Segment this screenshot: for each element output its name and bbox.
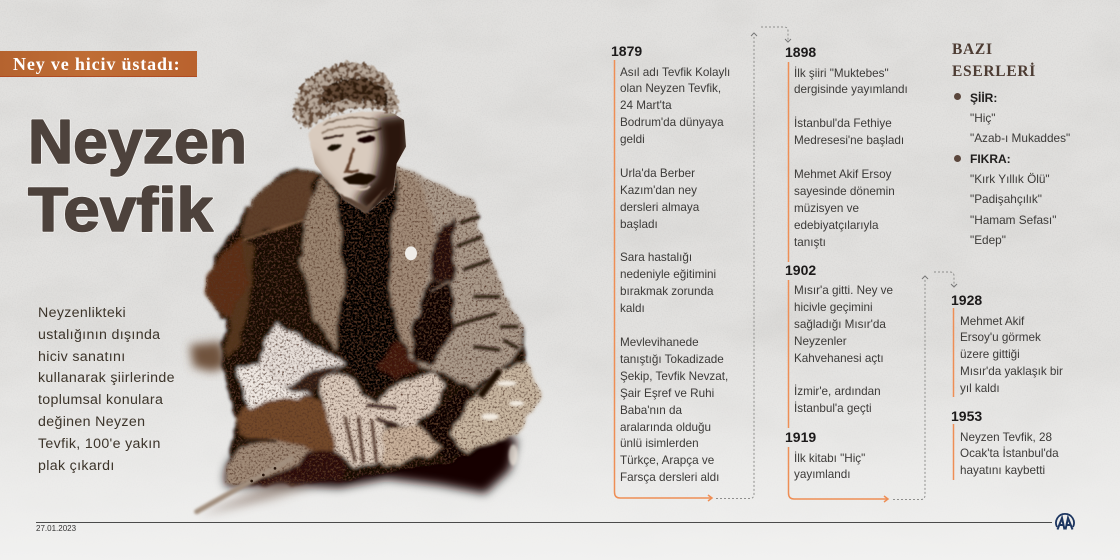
text 1953 [960, 430, 1059, 477]
text 1928: üzere gittiği [960, 348, 1020, 361]
face details [322, 118, 387, 213]
text 1879: aralarında olduğu [620, 421, 711, 434]
list: anecdotes: "Edep" [970, 233, 1006, 247]
title: Tevfik [28, 176, 214, 245]
timeline 1919 [785, 429, 865, 481]
text 1879: ünlü isimlerden [620, 437, 699, 450]
text 1898: sayesinde dönemin [794, 185, 895, 198]
list: poems: "Azab-ı Mukaddes" [970, 131, 1070, 145]
trousers [237, 397, 343, 460]
category: fıkra: FIKRA: [970, 152, 1011, 166]
title: Neyzen [28, 108, 247, 177]
list: anecdotes: "Kırk Yıllık Ölü" [970, 172, 1050, 186]
right lapel [390, 163, 437, 368]
title: Neyzen [28, 108, 247, 177]
list: anecdotes: "Hamam Sefası" [970, 213, 1056, 227]
text 1928: yıl kaldı [960, 382, 1000, 395]
coat [242, 172, 317, 238]
text 1879: Farsça dersleri aldı [620, 471, 719, 484]
text 1879: olan Neyzen Tevfik, [620, 82, 721, 95]
text 1879: başladı [620, 218, 658, 231]
face shadow [308, 113, 410, 217]
text 1928: Ersoy'u görmek [960, 331, 1041, 344]
banner: Ney ve hiciv üstadı [0, 51, 197, 77]
title [27, 108, 247, 245]
black sweater [337, 173, 423, 393]
category: şiir: ŞİİR: [970, 91, 997, 105]
head [308, 111, 406, 213]
text 1928: Mısır'da yaklaşık bir [960, 365, 1063, 378]
text 1879: Urla'da Berber [620, 167, 695, 180]
flute base shadow [200, 480, 313, 515]
year 1898: 1898 [785, 44, 816, 60]
text 1928 [960, 314, 1063, 395]
intro paragraph: Neyzenlikteki [38, 305, 126, 321]
text 1879: dersleri almaya [620, 201, 699, 214]
timeline 1879 [611, 43, 730, 484]
intro paragraph: hiciv sanatını [38, 349, 126, 365]
right log [450, 362, 542, 452]
text 1898: Medresesi'ne başladı [794, 134, 904, 147]
left sleeve [258, 323, 347, 393]
banner: Ney ve hiciv üstadı: Ney ve hiciv üstadı: [13, 54, 180, 74]
text 1879: tanıştığı Tokadizade [620, 353, 724, 366]
text 1902: İzmir'e, ardından [794, 385, 881, 398]
text 1879: bırakmak zorunda [620, 285, 714, 298]
cuff [283, 365, 345, 398]
intro paragraph: kullanarak şiirlerinde [38, 370, 175, 386]
text 1902: İstanbul'a geçti [794, 402, 872, 415]
list: anecdotes: "Padişahçılık" [970, 192, 1042, 206]
portrait of Neyzen Tevfik [183, 60, 544, 517]
text 1953: Neyzen Tevfik, 28 [960, 430, 1052, 444]
intro paragraph: ustalığının dışında [38, 327, 160, 343]
hair [293, 62, 398, 130]
text 1879: Kazım'dan ney [620, 184, 697, 197]
timeline 1928 [951, 292, 1063, 395]
works heading: ESERLERİ [952, 63, 1036, 80]
text 1902: Mısır'a gitti. Ney ve [794, 284, 893, 297]
text 1898: İstanbul'da Fethiye [794, 117, 892, 130]
year 1879: 1879 [611, 43, 642, 59]
left lapel [300, 177, 345, 350]
year 1919: 1919 [785, 429, 816, 445]
intro paragraph: Tevfik, 100'e yakın [38, 436, 161, 452]
intro paragraph: toplumsal konulara [38, 392, 163, 408]
text 1879: Asıl adı Tevfik Kolaylı [620, 66, 730, 78]
text 1879: Bodrum'da dünyaya [620, 116, 724, 129]
text 1898: edebiyatçılarıyla [794, 219, 878, 232]
panel: some works [952, 41, 1070, 247]
footer rule [36, 522, 1052, 523]
timeline 1898 [785, 44, 908, 249]
text 1879: 24 Mart'ta [620, 99, 672, 112]
jacket dark front [412, 280, 455, 367]
year 1902: 1902 [785, 262, 816, 278]
text 1919 [794, 452, 865, 481]
intro paragraph [38, 305, 175, 474]
text 1898: dergisinde yayımlandı [794, 83, 908, 96]
text 1879: Türkçe, Arapça ve [620, 454, 714, 467]
text 1898: tanıştı [794, 236, 826, 249]
year 1928: 1928 [951, 292, 982, 308]
list: anecdotes [970, 172, 1056, 247]
text 1879: nedeniyle eğitimini [620, 268, 716, 281]
text 1879: kaldı [620, 302, 645, 315]
text 1898: İlk şiiri "Muktebes" [794, 66, 889, 80]
text 1879: Şair Eşref ve Ruhi [620, 387, 714, 400]
year 1953: 1953 [951, 408, 982, 424]
date: 27.01.2023 [36, 524, 76, 533]
jacket creases and hand details [237, 217, 518, 463]
text 1879: Sara hastalığı [620, 251, 692, 264]
works heading: BAZI [952, 41, 993, 58]
text 1879 [620, 66, 730, 484]
bullet [954, 93, 961, 100]
text 1879: Mevlevihanede [620, 336, 699, 349]
text 1902: hicivle geçimini [794, 301, 873, 314]
left log [190, 342, 227, 372]
hands [320, 373, 445, 467]
text 1902: sağladığı Mısır'da [794, 318, 886, 331]
text 1898 [794, 66, 908, 249]
highlights on log [481, 381, 524, 466]
text 1928: Mehmet Akif [960, 314, 1024, 328]
bullet [954, 155, 961, 162]
ney flute [197, 458, 292, 512]
text 1902: Neyzenler [794, 335, 847, 348]
text 1953: hayatını kaybetti [960, 464, 1045, 477]
timeline 1953 [951, 408, 1059, 477]
text 1902 [794, 284, 893, 415]
intro paragraph: değinen Neyzen [38, 414, 145, 430]
text 1879: Baba'nın da [620, 404, 682, 417]
text 1919: İlk kitabı "Hiç" [794, 452, 865, 464]
text 1898: müzisyen ve [794, 202, 859, 215]
ground shadow [225, 407, 517, 493]
list: poems [970, 111, 1070, 145]
intro paragraph: plak çıkardı [38, 458, 115, 474]
figure [206, 163, 542, 487]
works heading [952, 41, 1036, 80]
right sleeve [398, 165, 522, 387]
foot [226, 440, 313, 487]
text 1902: Kahvehanesi açtı [794, 352, 884, 365]
silhouette base [206, 165, 542, 483]
text 1879: geldi [620, 133, 645, 146]
timeline 1902 [785, 262, 893, 415]
list: poems: "Hiç" [970, 111, 995, 125]
sleeve lower fold [237, 365, 313, 407]
lapel pin [405, 246, 417, 260]
text 1879: Şekip, Tevfik Nevzat, [620, 370, 728, 383]
text 1898: Mehmet Akif Ersoy [794, 168, 891, 181]
icon: AA logo [1055, 513, 1075, 530]
title: Tevfik [28, 176, 214, 245]
text 1953: Ocak'ta İstanbul'da [960, 447, 1059, 460]
text 1919: yayımlandı [794, 468, 851, 481]
